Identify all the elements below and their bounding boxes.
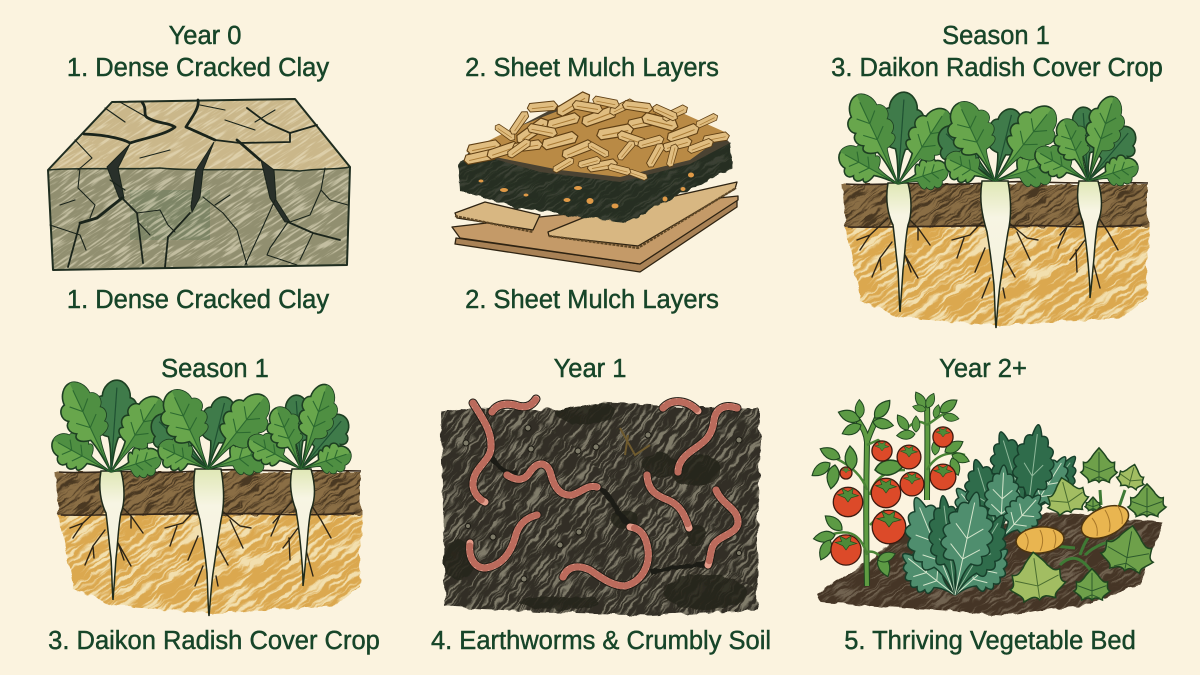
label: 2. Sheet Mulch Layers: 2. Sheet Mulch Layers: [465, 286, 719, 314]
cardboard layers: [452, 182, 738, 272]
crumbs: [463, 425, 742, 582]
label: 1. Dense Cracked Clay: 1. Dense Cracked Clay: [67, 286, 329, 314]
heading: Season 1: Season 1: [161, 355, 269, 383]
label: 4. Earthworms & Crumbly Soil: 4. Earthworms & Crumbly Soil: [431, 627, 771, 655]
panel: sheet mulch heading: 2. Sheet Mulch Layers: [465, 54, 719, 82]
illustration: sheet mulch stack: [450, 90, 740, 272]
compost layer: [458, 142, 733, 223]
label: 5. Thriving Vegetable Bed: 5. Thriving Vegetable Bed: [844, 627, 1136, 655]
kale back: [942, 422, 1089, 552]
squash fruit: [1015, 499, 1134, 555]
panel: season 1 heading: 3. Daikon Radish Cover Crop: [831, 54, 1163, 82]
tomato plants: [858, 405, 927, 586]
squash leaves: [1081, 448, 1117, 482]
worms: [470, 399, 738, 586]
soil mound: [817, 512, 1162, 616]
heading: Year 2+: Year 2+: [939, 355, 1027, 383]
illustration: cracked clay block: [40, 95, 360, 275]
panel: year 0 heading: 1. Dense Cracked Clay: [67, 54, 329, 82]
panel: season 1 heading: Season 1: [942, 22, 1050, 50]
heading: Year 1: Year 1: [554, 355, 626, 383]
illustration: daikon radish top row: [832, 86, 1155, 330]
illustration: thriving vegetable bed: [809, 390, 1170, 620]
wood chips layer: [466, 103, 727, 177]
illustration: earthworms in crumbly soil: [435, 395, 765, 620]
dark wedge cracks: [107, 142, 290, 222]
kale front: [891, 487, 1020, 611]
panel: year 0 heading: Year 0: [169, 22, 241, 50]
label: 3. Daikon Radish Cover Crop: 3. Daikon Radish Cover Crop: [48, 627, 380, 655]
squash vines: [1045, 490, 1145, 572]
illustration: daikon radish bottom row: [45, 374, 368, 618]
panel: season 1 heading: [831, 22, 1163, 82]
panel: year 0 heading: [67, 22, 329, 82]
